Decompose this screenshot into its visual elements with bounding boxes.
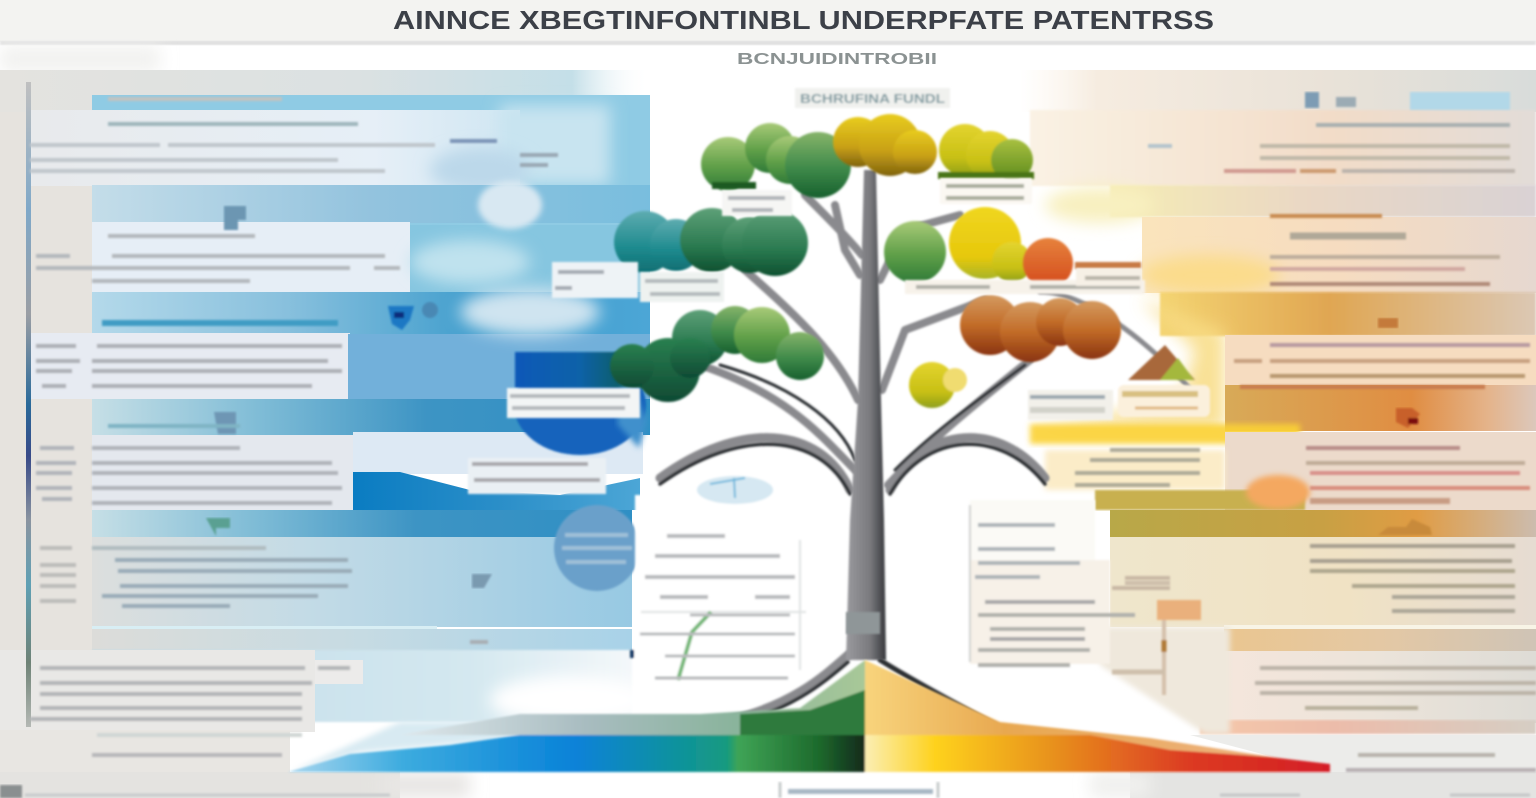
label: lake bbox=[507, 388, 640, 418]
deep blue lake bbox=[514, 352, 647, 455]
panel: center right note bbox=[970, 500, 1135, 665]
canopy: top green bbox=[701, 123, 851, 198]
icon: top marker bbox=[224, 206, 246, 230]
label: mid left two bbox=[640, 272, 724, 302]
pin marker bbox=[1112, 583, 1201, 695]
canopy: small yellow bbox=[909, 362, 967, 408]
bottom corner marks bbox=[0, 785, 1530, 798]
ground: left spectrum bbox=[288, 735, 865, 772]
ground: right spectrum bbox=[865, 735, 1330, 772]
base: spectrum ground bbox=[288, 660, 1330, 772]
panel: right text lines bbox=[1075, 125, 1536, 770]
label: lower right one bbox=[1028, 390, 1113, 420]
icon: top right marker bbox=[1305, 92, 1356, 108]
panel: right warm bbox=[1020, 70, 1536, 798]
label: top center bbox=[795, 88, 950, 108]
canopy: dark green bbox=[610, 338, 710, 402]
panel: center left note bbox=[632, 476, 807, 680]
title: AINNCE XBEGTINFONTINBL UNDERPFATE PATENTRSS bbox=[393, 5, 1214, 35]
icon: green sprout line bbox=[678, 612, 711, 680]
label: mid left one bbox=[552, 262, 638, 298]
label: orange side bbox=[1076, 268, 1142, 286]
left vertical strip bbox=[26, 82, 31, 727]
tree labels bbox=[468, 88, 1210, 494]
ground: left slope bbox=[400, 660, 865, 735]
hill: brown and green bbox=[1128, 345, 1195, 380]
canopy: top yellow bbox=[833, 114, 1034, 181]
ground: right slope bbox=[865, 660, 1330, 766]
branches bbox=[660, 195, 1195, 728]
icon: lake marker bbox=[214, 412, 236, 434]
canopy: lower green bbox=[672, 306, 824, 380]
label: mid right bbox=[905, 280, 1145, 294]
canopy: middle green and yellow bbox=[884, 207, 1032, 283]
icon: deep blue marker bbox=[388, 302, 438, 330]
canopy: teal green bbox=[614, 208, 808, 276]
canopy: autumn brown bbox=[960, 295, 1121, 362]
subtitle: BCNJUIDINTROBII bbox=[737, 51, 937, 68]
panel: left blue bbox=[0, 46, 650, 798]
label: top left branch bbox=[722, 190, 792, 216]
label: top center: BCHRUFINA FUNDL bbox=[800, 91, 945, 106]
blue circle badge bbox=[554, 505, 640, 591]
canopy: orange ball bbox=[1023, 238, 1141, 288]
icon: small hill marker bbox=[1378, 519, 1432, 535]
root knot bbox=[846, 612, 880, 634]
bottom label bbox=[780, 782, 938, 798]
panel: left text lines bbox=[30, 99, 558, 755]
tree bbox=[610, 114, 1195, 728]
icon: leaf marker bbox=[206, 518, 230, 536]
icon: heading marker bbox=[1378, 318, 1398, 328]
label: top right branch bbox=[940, 178, 1032, 204]
trunk bbox=[846, 170, 886, 660]
title band bbox=[0, 0, 1536, 45]
icon: flame marker bbox=[1396, 408, 1420, 428]
label: lower right two bbox=[1118, 385, 1210, 417]
label: left lower bbox=[468, 458, 606, 494]
icon: wave marker bbox=[472, 574, 492, 588]
